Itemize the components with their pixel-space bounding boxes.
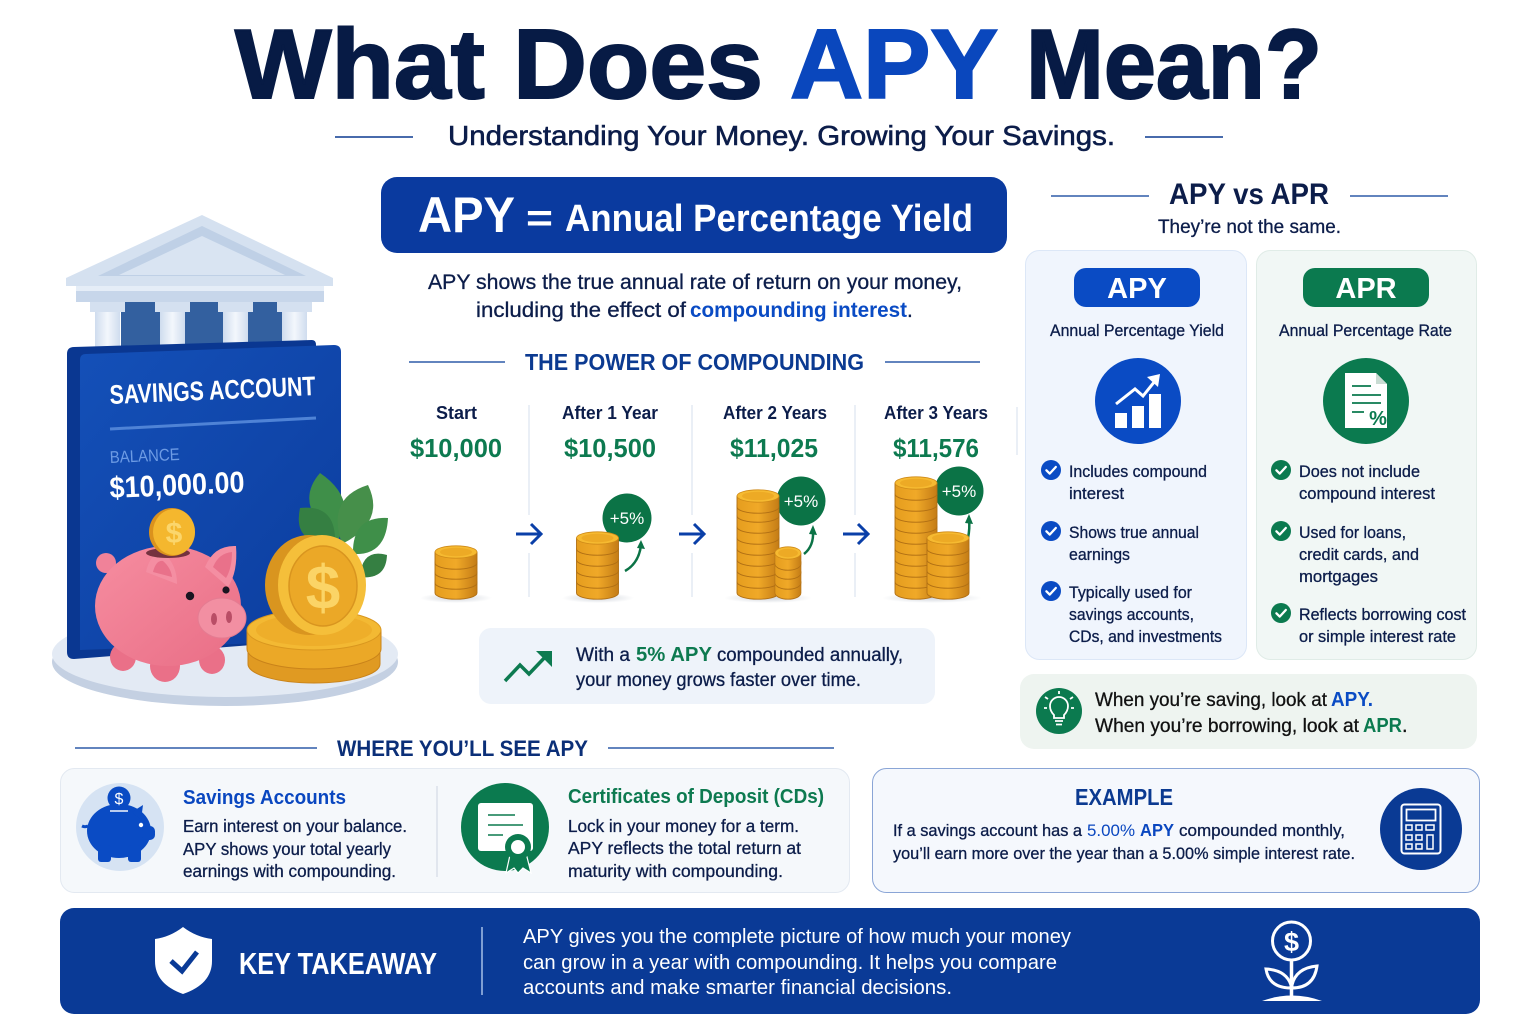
- apy pill: [1074, 268, 1200, 307]
- apr pill: APR: [1335, 273, 1397, 305]
- title: APY: [790, 9, 998, 119]
- panel: example: APY: [1140, 820, 1174, 840]
- bullet: loans: credit cards, and: [1299, 546, 1419, 564]
- bullet: borrowing cost: or simple interest rate: [1299, 628, 1456, 646]
- title: Mean?: [1026, 9, 1322, 119]
- bullet: no compound interest: Does not include: [1299, 463, 1420, 481]
- callout: saving vs borrowing tip: .: [1402, 715, 1408, 737]
- bullet: true annual earnings: earnings: [1069, 546, 1130, 564]
- savings account card: SAVINGS ACCOUNT: [109, 371, 316, 410]
- heading: apy vs apr: [1051, 178, 1448, 238]
- callout: saving vs borrowing tip: APR: [1363, 715, 1403, 737]
- heading: where you'll see apy: WHERE YOU’LL SEE APY: [337, 736, 588, 761]
- definition text: [428, 271, 962, 322]
- panel: savings illustration: [52, 215, 398, 706]
- step: after 3 years: +5%: [942, 482, 976, 501]
- text: certificates of deposit: Lock in your money for a term.: [568, 816, 799, 836]
- icon: money plant: $: [1284, 927, 1299, 957]
- step: after 2 years: $11,025: [730, 433, 818, 463]
- icon: rate document: %: [1369, 408, 1387, 430]
- text: certificates of deposit: maturity with compounding.: [568, 861, 783, 881]
- title: What Does: [235, 9, 763, 119]
- callout: growth note: compounded annually,: [717, 645, 903, 666]
- icon: growth chart: [1095, 358, 1181, 444]
- panel: apy card: [1026, 250, 1246, 660]
- panel: example: [872, 768, 1480, 892]
- takeaway text: accounts and make smarter financial decisions.: [523, 977, 952, 999]
- platform: [52, 611, 398, 706]
- savings account card: BALANCE: [109, 445, 180, 467]
- definition text: APY shows the true annual rate of return on your money,: [428, 271, 962, 294]
- icon: trend arrow: [505, 651, 552, 681]
- takeaway text: [523, 926, 1071, 999]
- text: certificates of deposit: Certificates of Deposit (CDs): [568, 785, 824, 808]
- icon: bank building: [66, 215, 333, 350]
- icon: rate document: [1323, 358, 1409, 444]
- step: after 1 year: $10,500: [564, 433, 656, 463]
- icon: piggy bank: $: [166, 517, 183, 550]
- definition banner: Annual Percentage Yield: [565, 198, 973, 240]
- callout: growth note: With a: [576, 645, 630, 666]
- step: start: [410, 403, 502, 603]
- subtitle: Understanding Your Money. Growing Your Savings.: [448, 120, 1115, 151]
- icon: blue piggy bank: $: [115, 791, 124, 808]
- step: after 1 year: After 1 Year: [562, 403, 658, 423]
- panel: key takeaway: KEY TAKEAWAY: [239, 946, 437, 981]
- icon: calculator: [1380, 788, 1462, 870]
- icon: shield check: [155, 927, 212, 994]
- panel: apy card: Annual Percentage Yield: [1050, 322, 1224, 340]
- definition text: .: [907, 299, 913, 322]
- panel: example: compounded monthly,: [1179, 821, 1345, 840]
- bullet: true annual earnings: [1041, 521, 1199, 564]
- arrow: [679, 524, 704, 544]
- bullet: includes compound interest: Includes compound: [1069, 463, 1207, 481]
- text: certificates of deposit: [568, 785, 824, 881]
- bullet: true annual earnings: Shows true annual: [1069, 524, 1199, 542]
- bullet: loans: mortgages: [1299, 568, 1378, 586]
- callout: saving vs borrowing tip: When you’re borrowing, look at: [1095, 715, 1360, 737]
- arrow: [843, 524, 868, 544]
- panel: example: If a savings account has a: [893, 821, 1083, 840]
- callout: growth note: your money grows faster over time.: [576, 670, 861, 691]
- step: after 1 year: [562, 403, 658, 603]
- panel: example: EXAMPLE: [1075, 784, 1173, 810]
- step: after 3 years: After 3 Years: [884, 403, 988, 423]
- apr pill: [1303, 268, 1429, 307]
- callout: saving vs borrowing tip: When you’re saving, look at: [1095, 689, 1328, 711]
- icon: lightbulb: [1036, 688, 1082, 734]
- text: savings accounts: [183, 786, 407, 881]
- definition banner: [381, 177, 1007, 253]
- arrow: [516, 524, 541, 544]
- bullet: includes compound interest: [1041, 460, 1207, 503]
- icon: large dollar coin: [265, 535, 366, 635]
- step: after 3 years: $11,576: [893, 433, 979, 463]
- step: start: Start: [436, 403, 477, 423]
- heading: the power of compounding: THE POWER OF COMPOUNDING: [525, 349, 864, 375]
- step: after 2 years: +5%: [784, 492, 818, 511]
- definition banner: APY: [418, 187, 515, 243]
- icon: large dollar coin: $: [306, 554, 340, 623]
- definition banner: =: [526, 198, 553, 240]
- callout: growth note: 5% APY: [636, 644, 713, 666]
- panel: key takeaway: [60, 908, 1480, 1014]
- text: savings accounts: APY shows your total yearly: [183, 839, 391, 859]
- panel: apr card: [1256, 250, 1476, 660]
- step: after 1 year: +5%: [610, 509, 644, 528]
- step: after 2 years: [723, 403, 827, 603]
- savings account card: $10,000.00: [109, 466, 245, 505]
- icon: money plant: [1262, 922, 1322, 1001]
- apy pill: APY: [1107, 273, 1167, 305]
- savings account card: [67, 340, 341, 659]
- text: savings accounts: earnings with compounding.: [183, 861, 396, 881]
- icon: blue piggy bank: [76, 783, 164, 871]
- bullet: loans: [1271, 521, 1419, 586]
- panel: apr card: Annual Percentage Rate: [1279, 322, 1452, 340]
- bullet: includes compound interest: interest: [1069, 485, 1124, 503]
- icon: piggy bank: [95, 508, 246, 682]
- bullet: savings uses: savings accounts,: [1069, 606, 1194, 624]
- bullet: no compound interest: [1271, 460, 1435, 503]
- text: certificates of deposit: APY reflects the total return at: [568, 838, 801, 858]
- callout: saving vs borrowing tip: APY.: [1331, 689, 1373, 711]
- callout: growth note: [479, 628, 935, 704]
- takeaway text: can grow in a year with compounding. It helps you compare: [523, 952, 1057, 974]
- icon: leaves: [299, 473, 388, 577]
- takeaway text: APY gives you the complete picture of how much your money: [523, 926, 1071, 948]
- bullet: savings uses: Typically used for: [1069, 584, 1192, 602]
- panel: example: 5.00%: [1087, 821, 1135, 840]
- callout: saving vs borrowing tip: [1020, 674, 1477, 749]
- step: after 3 years: [882, 403, 988, 603]
- bullet: savings uses: [1041, 581, 1222, 646]
- bullet: borrowing cost: Reflects borrowing cost: [1299, 606, 1466, 624]
- step: after 2 years: After 2 Years: [723, 403, 827, 423]
- definition text: compounding interest: [690, 299, 907, 322]
- panel: example: you’ll earn more over the year than a 5.00% simple interest rate.: [893, 844, 1355, 863]
- heading: apy vs apr: They’re not the same.: [1158, 217, 1341, 238]
- text: savings accounts: Earn interest on your balance.: [183, 816, 407, 836]
- chart: compounding coin stacks: [410, 403, 1017, 603]
- text: savings accounts: Savings Accounts: [183, 786, 346, 809]
- heading: apy vs apr: APY vs APR: [1169, 178, 1329, 211]
- panel: where you'll see apy: [60, 768, 850, 892]
- bullet: borrowing cost: [1271, 603, 1466, 646]
- bullet: savings uses: CDs, and investments: [1069, 628, 1222, 646]
- bullet: no compound interest: compound interest: [1299, 485, 1435, 503]
- title: [235, 9, 1322, 119]
- icon: certificate: [461, 783, 549, 873]
- step: start: $10,000: [410, 433, 502, 463]
- bullet: loans: Used for loans,: [1299, 524, 1406, 542]
- definition text: including the effect of: [476, 299, 686, 322]
- icon: stacked coins: [247, 610, 381, 683]
